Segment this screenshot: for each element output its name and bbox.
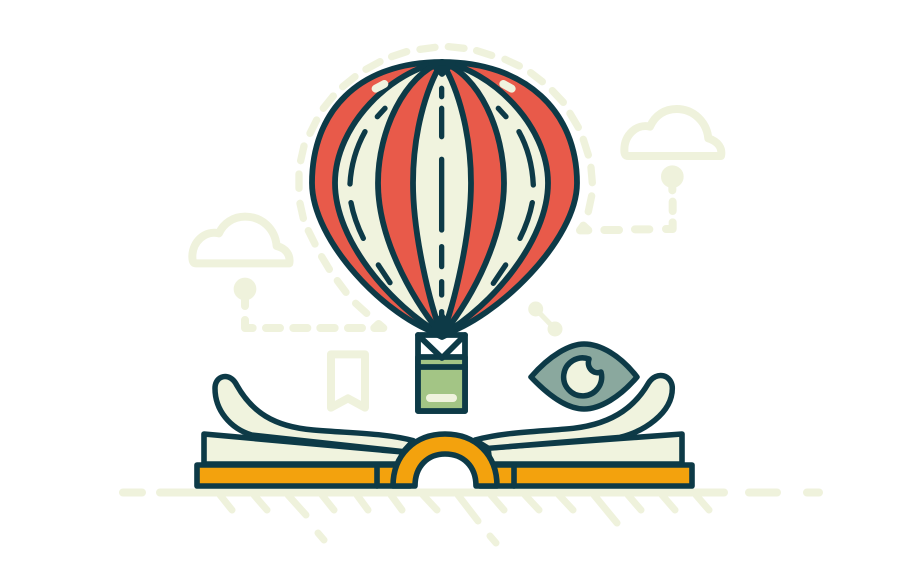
bookmark icon	[331, 354, 365, 408]
left page stack	[204, 434, 403, 464]
balloon highlights	[376, 84, 512, 89]
right cover	[480, 465, 692, 486]
left cover	[197, 465, 410, 486]
right curled page	[475, 375, 672, 448]
eye icon	[531, 344, 637, 409]
right cloud with connector	[580, 109, 721, 230]
link icon	[531, 304, 560, 334]
balloon envelope	[312, 62, 577, 337]
left curled page	[215, 377, 413, 452]
left cloud with connector	[192, 217, 383, 328]
balloon crown and throat	[431, 63, 453, 337]
balloon stitching	[350, 88, 533, 318]
dashed circle around balloon	[299, 47, 592, 313]
open book	[197, 375, 692, 486]
right page stack	[488, 434, 682, 464]
spine arch	[393, 434, 497, 486]
balloon basket	[418, 335, 465, 411]
ground line with hatches	[123, 492, 819, 543]
